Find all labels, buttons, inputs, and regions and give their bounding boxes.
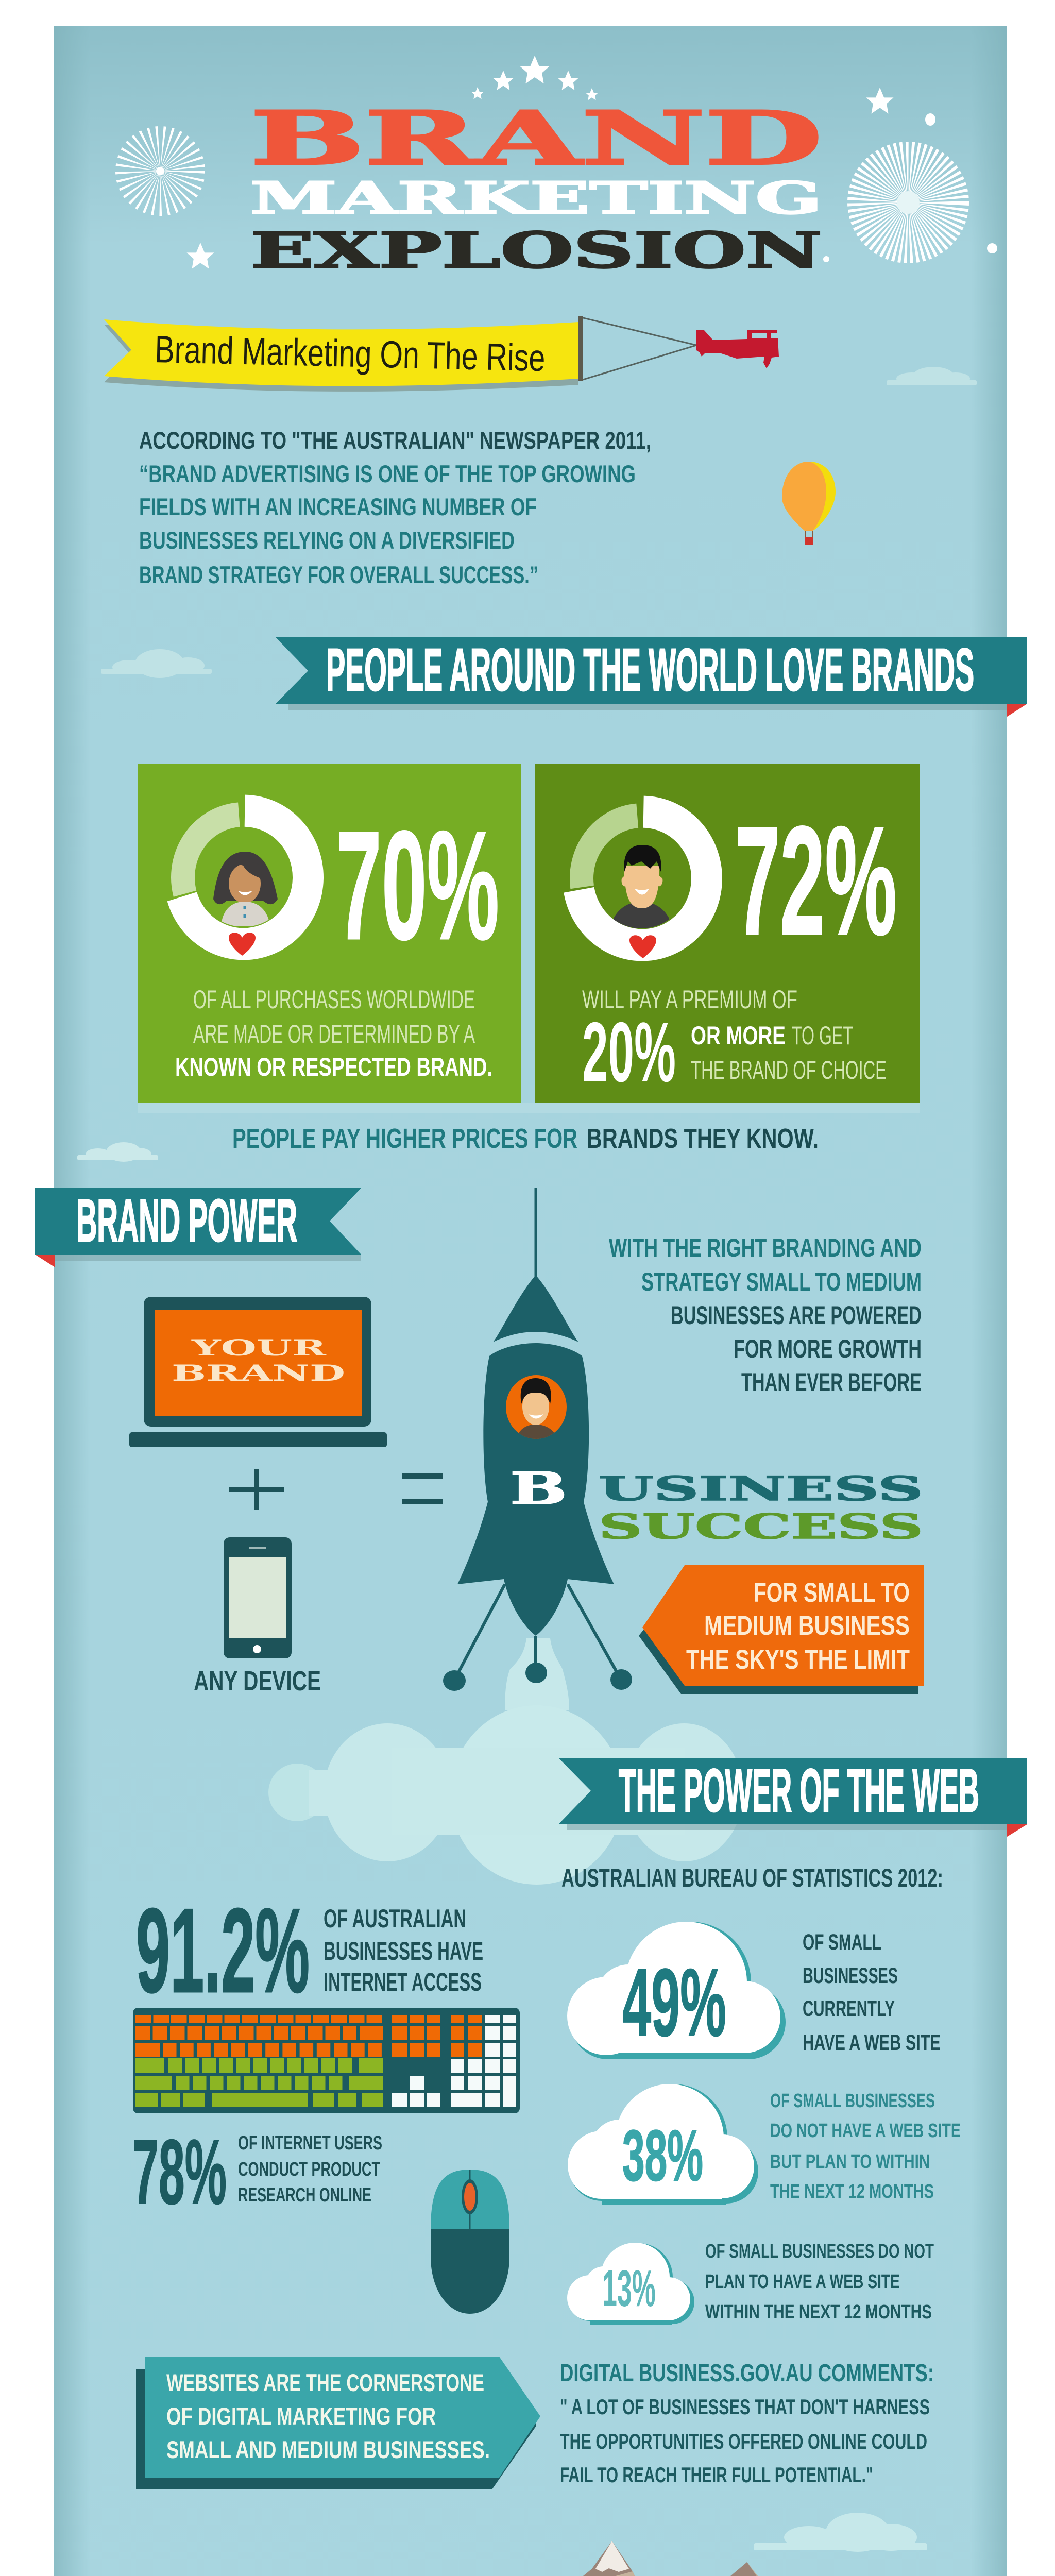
cloud bbox=[568, 2084, 758, 2205]
any device label: ANY DEVICE bbox=[194, 1666, 321, 1697]
ribbon: power of the web bbox=[558, 1757, 1027, 1837]
callout: sky's the limit: THE SKY'S THE LIMIT bbox=[686, 1645, 910, 1675]
stat 13 percent: 13% bbox=[602, 2260, 656, 2317]
stat 13 percent bbox=[567, 2241, 934, 2325]
callout: websites cornerstone: OF DIGITAL MARKETING FOR bbox=[166, 2402, 436, 2430]
stat 78 percent: RESEARCH ONLINE bbox=[238, 2184, 371, 2206]
description: WILL PAY A PREMIUM OF bbox=[582, 985, 797, 1014]
description bbox=[582, 985, 887, 1099]
intro paragraph: BRAND STRATEGY FOR OVERALL SUCCESS.” bbox=[139, 561, 538, 588]
icon: heart bbox=[629, 935, 656, 958]
intro paragraph: FIELDS WITH AN INCREASING NUMBER OF bbox=[139, 493, 537, 520]
callout: sky's the limit: MEDIUM BUSINESS bbox=[704, 1611, 910, 1641]
text: with the right branding: FOR MORE GROWTH bbox=[734, 1334, 922, 1363]
business success heading: USINESS bbox=[599, 1469, 923, 1509]
text: with the right branding: THAN EVER BEFORE bbox=[741, 1368, 922, 1397]
quote: digital business: DIGITAL BUSINESS.GOV.AU COMMENTS: bbox=[560, 2360, 934, 2387]
icon: equals bbox=[402, 1476, 443, 1501]
callout: sky's the limit bbox=[639, 1565, 924, 1694]
icon: rocket bbox=[443, 1188, 632, 1691]
ribbon: brand power bbox=[35, 1187, 361, 1267]
icon: plus bbox=[229, 1469, 284, 1510]
business success heading: B bbox=[510, 1463, 567, 1515]
ribbon: brand power: BRAND POWER bbox=[76, 1187, 297, 1254]
small cloud bbox=[77, 1142, 158, 1162]
icon: heart bbox=[229, 933, 256, 956]
stat 78 percent: OF INTERNET USERS bbox=[238, 2132, 382, 2154]
cloud bbox=[567, 1922, 786, 2059]
text: with the right branding bbox=[609, 1233, 922, 1397]
sky cloud bbox=[754, 2513, 927, 2552]
intro paragraph: ACCORDING TO "THE AUSTRALIAN" NEWSPAPER 2011, bbox=[139, 427, 651, 454]
title: BRAND bbox=[250, 96, 822, 181]
description: KNOWN OR RESPECTED BRAND. bbox=[175, 1053, 492, 1081]
ribbon: people around the world bbox=[276, 636, 1027, 717]
banner with plane bbox=[104, 316, 779, 392]
banner text: Brand Marketing On The Rise bbox=[155, 328, 546, 379]
description: TO GET bbox=[792, 1021, 853, 1050]
quote: digital business: " A LOT OF BUSINESSES THAT DON'T HARNESS bbox=[560, 2395, 930, 2419]
large smoke cloud bbox=[268, 1638, 743, 1885]
business success heading: SUCCESS bbox=[599, 1506, 923, 1547]
stat 91.2 percent: 91.2% bbox=[136, 1884, 310, 2018]
tagline: PEOPLE PAY HIGHER PRICES FOR bbox=[232, 1123, 577, 1154]
stat 38 percent: BUT PLAN TO WITHIN bbox=[770, 2151, 930, 2173]
stat 49 percent: 49% bbox=[622, 1950, 726, 2056]
stat 13 percent: PLAN TO HAVE A WEB SITE bbox=[705, 2271, 900, 2293]
stat 49 percent bbox=[567, 1922, 941, 2059]
quote: digital business: FAIL TO REACH THEIR FULL POTENTIAL." bbox=[560, 2463, 873, 2487]
title: MARKETING bbox=[250, 173, 822, 224]
description bbox=[175, 985, 492, 1081]
icon: phone bbox=[224, 1537, 292, 1658]
your brand text bbox=[172, 1335, 345, 1386]
description: THE BRAND OF CHOICE bbox=[691, 1056, 887, 1084]
text: with the right branding: STRATEGY SMALL TO MEDIUM bbox=[641, 1267, 922, 1296]
stat 91.2 percent: INTERNET ACCESS bbox=[324, 1968, 482, 1996]
cloud left bbox=[101, 649, 212, 678]
quote: digital business bbox=[560, 2360, 934, 2487]
stat 78 percent: 78% bbox=[132, 2121, 227, 2223]
stat 78 percent: CONDUCT PRODUCT bbox=[238, 2159, 380, 2180]
icon: mouse bbox=[431, 2170, 509, 2314]
description: OF ALL PURCHASES WORLDWIDE bbox=[193, 985, 475, 1014]
callout: websites cornerstone: WEBSITES ARE THE CORNERSTONE bbox=[166, 2369, 484, 2396]
cloud top right bbox=[887, 367, 977, 385]
description: ARE MADE OR DETERMINED BY A bbox=[193, 1020, 475, 1048]
callout: websites cornerstone: SMALL AND MEDIUM BUSINESSES. bbox=[166, 2436, 490, 2463]
stat 49 percent: HAVE A WEB SITE bbox=[803, 2030, 941, 2055]
intro paragraph bbox=[139, 427, 651, 588]
callout: sky's the limit: FOR SMALL TO bbox=[754, 1578, 910, 1608]
stat 91.2 percent: BUSINESSES HAVE bbox=[324, 1937, 483, 1965]
callout: websites cornerstone bbox=[136, 2357, 540, 2489]
stat 38 percent: OF SMALL BUSINESSES bbox=[770, 2090, 935, 2112]
tagline: BRANDS THEY KNOW. bbox=[587, 1123, 819, 1154]
porthole with pilot bbox=[506, 1375, 567, 1443]
icon: keyboard bbox=[133, 2008, 520, 2113]
stat 13 percent: WITHIN THE NEXT 12 MONTHS bbox=[705, 2301, 932, 2323]
text: with the right branding: BUSINESSES ARE POWERED bbox=[671, 1301, 922, 1330]
stat 38 percent: 38% bbox=[622, 2115, 703, 2196]
stat 49 percent: OF SMALL bbox=[803, 1930, 881, 1955]
stat 72: 72% bbox=[735, 794, 897, 967]
your brand text: BRAND bbox=[172, 1361, 345, 1386]
icon: man bbox=[610, 845, 672, 928]
firework left bbox=[137, 147, 184, 195]
stat 70: 70% bbox=[336, 799, 499, 972]
business success heading bbox=[510, 1463, 923, 1547]
intro paragraph: BUSINESSES RELYING ON A DIVERSIFIED bbox=[139, 527, 515, 554]
description: OR MORE bbox=[691, 1021, 786, 1050]
stat 91.2 percent: OF AUSTRALIAN bbox=[324, 1904, 466, 1933]
donut chart 70 bbox=[169, 800, 318, 955]
stat 38 percent bbox=[568, 2084, 961, 2205]
icon: laptop bbox=[129, 1297, 387, 1447]
stat 13 percent: OF SMALL BUSINESSES DO NOT bbox=[705, 2241, 934, 2262]
description: 20% bbox=[582, 1005, 676, 1099]
mountains bbox=[55, 2541, 1007, 2576]
firework right bbox=[874, 168, 942, 236]
cloud bbox=[567, 2243, 694, 2325]
quote: digital business: THE OPPORTUNITIES OFFERED ONLINE COULD bbox=[560, 2429, 927, 2453]
panel: 72 percent bbox=[535, 764, 920, 1103]
stat 38 percent: DO NOT HAVE A WEB SITE bbox=[770, 2120, 961, 2142]
title bbox=[250, 96, 822, 279]
icon: red biplane bbox=[696, 330, 779, 368]
stars bbox=[186, 56, 997, 269]
panel: 70 percent bbox=[138, 764, 920, 1113]
icon: woman bbox=[213, 852, 278, 926]
donut chart 72 bbox=[574, 807, 711, 950]
intro paragraph: “BRAND ADVERTISING IS ONE OF THE TOP GROWING bbox=[139, 460, 636, 487]
stat 38 percent: THE NEXT 12 MONTHS bbox=[770, 2181, 934, 2202]
stat 49 percent: BUSINESSES bbox=[803, 1963, 898, 1988]
stat 49 percent: CURRENTLY bbox=[803, 1996, 895, 2021]
icon: hot air balloon bbox=[782, 462, 836, 545]
your brand text: YOUR bbox=[191, 1335, 326, 1361]
text: with the right branding: WITH THE RIGHT BRANDING AND bbox=[609, 1233, 922, 1262]
title: EXPLOSION bbox=[250, 222, 822, 279]
